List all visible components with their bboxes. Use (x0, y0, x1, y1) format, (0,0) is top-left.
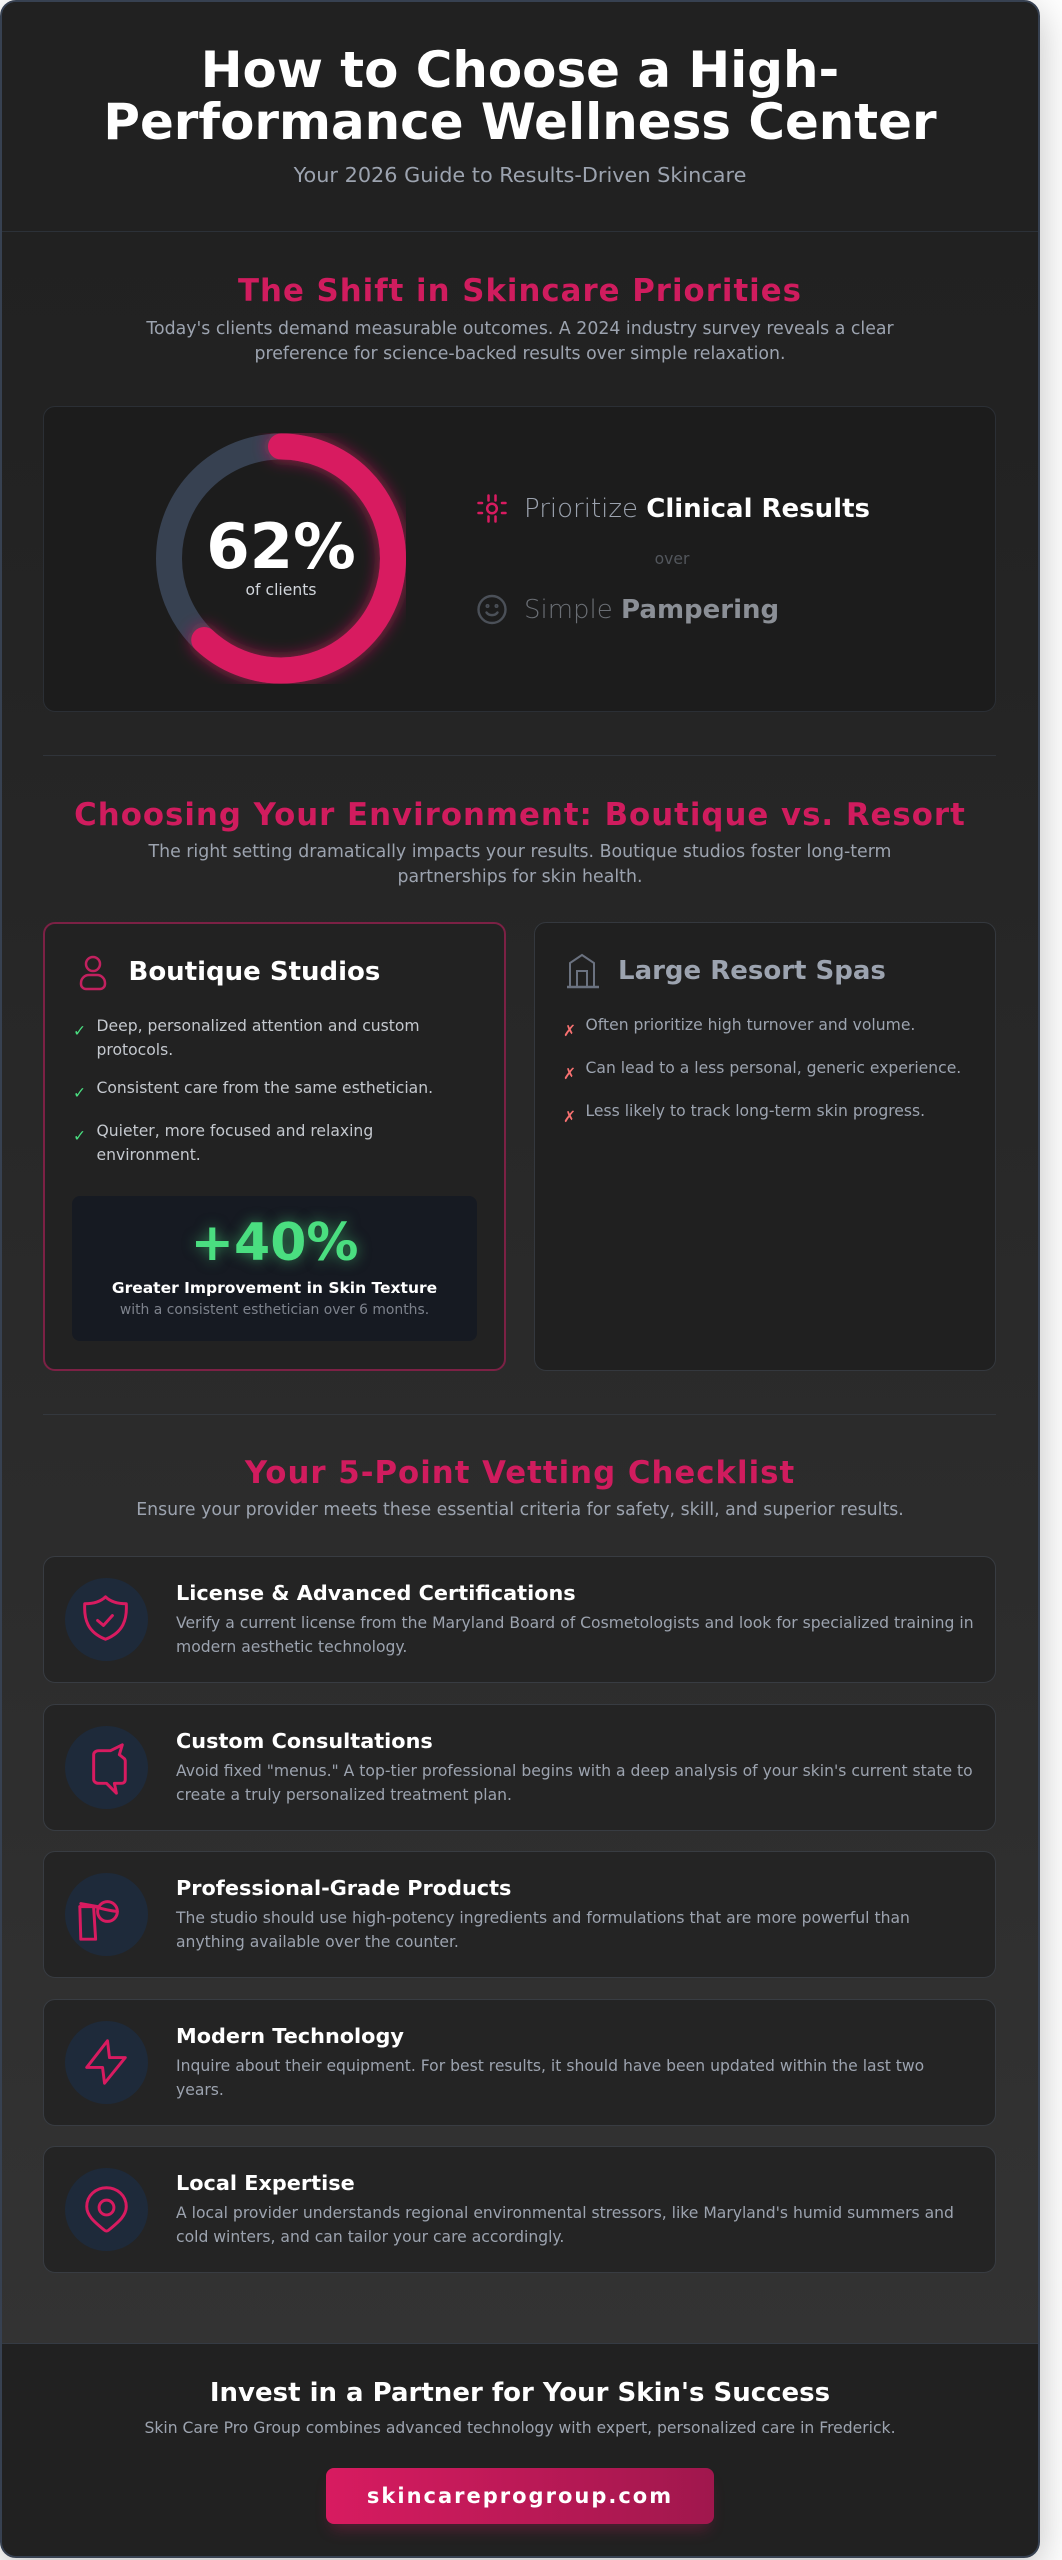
list: boutique benefits: Deep, personalized attention and custom (96, 1017, 420, 1035)
checklist item: products (43, 1851, 996, 1978)
checklist item: license (43, 1556, 996, 1683)
item description (176, 1614, 974, 1656)
icon: bolt (65, 2021, 148, 2104)
icon: pampering (477, 594, 507, 624)
icon: map pin (65, 2168, 148, 2251)
panel: large resort spas (534, 922, 996, 1371)
subtitle: Your 2026 Guide to Results-Driven Skincare (294, 163, 746, 187)
checklist item: consultations (43, 1704, 996, 1831)
item description: Avoid fixed "menus." A top-tier professional begins with a deep analysis of your skin's current state to (176, 1762, 973, 1780)
list: resort drawbacks: ✗ (563, 1022, 576, 1040)
icon: shield (65, 1578, 148, 1661)
list: resort drawbacks: Often prioritize high turnover and volume. (586, 1016, 915, 1034)
intro text: environment: The right setting dramatically impacts your results. Boutique studios foster long-term (149, 842, 891, 862)
stat label: Greater Improvement in Skin Texture (112, 1279, 437, 1297)
label: pampering: Simple Pampering (524, 595, 779, 625)
call to action button (326, 2468, 714, 2524)
heading: boutique studios: Boutique Studios (128, 957, 380, 987)
icon: chat (65, 1726, 148, 1809)
list: boutique benefits: protocols. (96, 1041, 173, 1059)
item description (176, 1909, 910, 1951)
title: Performance Wellness Center (103, 93, 937, 151)
list: boutique benefits: environment. (96, 1146, 201, 1164)
item description: create a truly personalized treatment plan. (176, 1786, 512, 1804)
intro text: environment (148, 842, 891, 886)
icon: clinical results (477, 494, 507, 523)
item description: cold winters, and can tailor your care accordingly. (176, 2228, 564, 2246)
stat value: +40% (190, 1213, 359, 1273)
list: resort drawbacks: Can lead to a less personal, generic experience. (586, 1059, 961, 1077)
list: boutique benefits (73, 1017, 433, 1164)
title: How to Choose a High- (201, 41, 839, 99)
header (0, 0, 1040, 232)
item description: years. (176, 2081, 224, 2099)
donut chart (156, 433, 406, 684)
item description (176, 2057, 924, 2099)
item description (176, 1762, 973, 1804)
item title: Professional-Grade Products (176, 1876, 511, 1900)
item title: Local Expertise (176, 2171, 355, 2195)
list: boutique benefits: ✓ (73, 1127, 86, 1145)
item title: Modern Technology (176, 2024, 404, 2048)
icon: products (65, 1873, 148, 1956)
list: boutique benefits: ✓ (73, 1022, 86, 1040)
stat box (72, 1196, 477, 1341)
title (103, 41, 937, 151)
checklist item: technology (43, 1999, 996, 2126)
heading: large resort spas: Large Resort Spas (618, 956, 886, 986)
list: resort drawbacks: ✗ (563, 1108, 576, 1126)
list: boutique benefits: Consistent care from the same esthetician. (96, 1079, 433, 1097)
item description: modern aesthetic technology. (176, 1638, 407, 1656)
item description (176, 2204, 954, 2246)
list: resort drawbacks: ✗ (563, 1065, 576, 1083)
footer (0, 2343, 1040, 2558)
checklist item: local expertise (43, 2146, 996, 2273)
label: clinical results: Prioritize Clinical Results (524, 494, 870, 524)
list: resort drawbacks (563, 1016, 961, 1126)
heading: environment: Choosing Your Environment: Boutique vs. Resort (74, 797, 966, 833)
heading: shift in priorities: The Shift in Skincare Priorities (238, 273, 802, 309)
divider (43, 1414, 996, 1415)
donut caption: of clients (246, 581, 316, 599)
intro text: shift (146, 319, 894, 364)
list: resort drawbacks: Less likely to track long-term skin progress. (586, 1102, 925, 1120)
footer heading: Invest in a Partner for Your Skin's Success (210, 2378, 830, 2408)
intro text: environment: partnerships for skin health. (398, 866, 642, 886)
panel: survey result (43, 406, 996, 712)
item description: A local provider understands regional environmental stressors, like Maryland's humid summers and (176, 2204, 954, 2222)
item title: Custom Consultations (176, 1729, 433, 1753)
panel: boutique studios (43, 922, 506, 1371)
item description: anything available over the counter. (176, 1933, 459, 1951)
call to action button: skincareprogroup.com (367, 2484, 673, 2508)
footer text: Skin Care Pro Group combines advanced technology with expert, personalized care in Frederick. (144, 2419, 896, 2437)
icon: building (567, 954, 599, 988)
intro text: checklist: Ensure your provider meets these essential criteria for safety, skill, and superior results. (136, 1500, 904, 1520)
list: boutique benefits: Quieter, more focused and relaxing (96, 1122, 373, 1140)
icon: person (80, 956, 106, 990)
intro text: shift: Today's clients demand measurable outcomes. A 2024 industry survey reveals a clear (146, 319, 894, 339)
divider (43, 755, 996, 756)
donut value: 62% (206, 510, 356, 583)
stat note: with a consistent esthetician over 6 months. (120, 1302, 429, 1318)
list: boutique benefits: ✓ (73, 1084, 86, 1102)
item title: License & Advanced Certifications (176, 1581, 576, 1605)
intro text: shift: preference for science-backed results over simple relaxation. (254, 344, 786, 364)
item description: Inquire about their equipment. For best results, it should have been updated within the last two (176, 2057, 924, 2075)
heading: checklist: Your 5-Point Vetting Checklist (245, 1455, 795, 1491)
item description: Verify a current license from the Maryland Board of Cosmetologists and look for specialized training in (176, 1614, 974, 1632)
label: over: over (655, 550, 689, 568)
item description: The studio should use high-potency ingredients and formulations that are more powerful than (176, 1909, 910, 1927)
